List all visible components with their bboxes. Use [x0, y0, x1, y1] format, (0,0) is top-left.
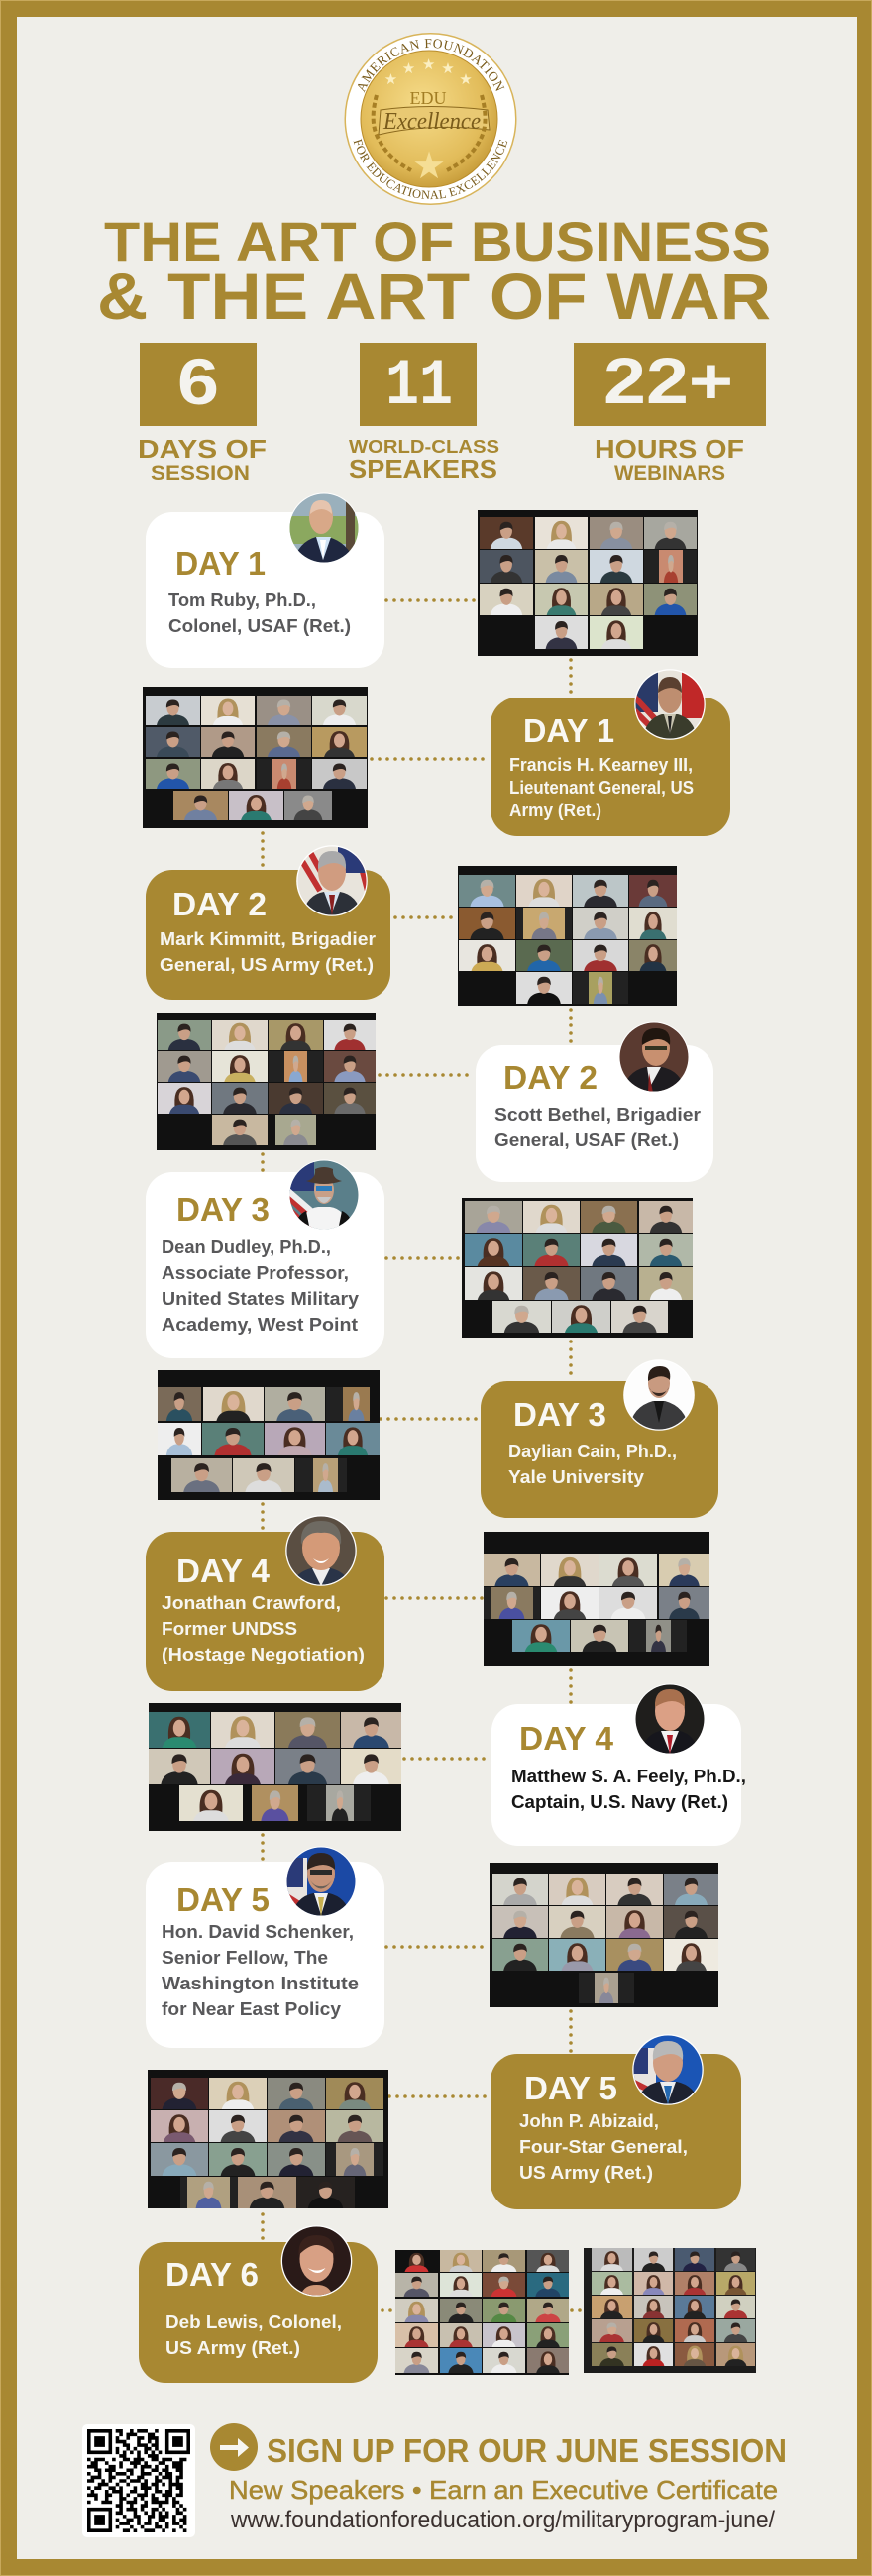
speaker name: Yale University: [508, 1467, 644, 1487]
speaker name: US Army (Ret.): [519, 2163, 653, 2183]
panel: day 2 Mark Kimmitt: [146, 845, 390, 1000]
speaker name: Matthew S. A. Feely, Ph.D.,: [511, 1767, 746, 1786]
avatar: Jonathan Crawford: [285, 1515, 357, 1586]
call to action text: New Speakers • Earn an Executive Certificate: [229, 2475, 778, 2505]
heading: DAY 5: DAY 5: [176, 1881, 270, 1918]
photo: zoom session day 6 first gallery: [395, 2250, 569, 2375]
logo: American Foundation gold seal: [345, 33, 517, 205]
speaker name: Tom Ruby, Ph.D.,: [168, 590, 316, 610]
logo: American Foundation gold seal: AMERICAN FOUNDATION: [358, 39, 505, 93]
stat: 6 days of session: DAYS OF: [138, 434, 267, 464]
speaker name: John P. Abizaid,: [519, 2111, 659, 2131]
avatar: Tom Ruby: [288, 492, 360, 564]
speaker name: [168, 590, 351, 636]
heading: DAY 4: DAY 4: [519, 1720, 614, 1757]
logo: American Foundation gold seal: EDU: [410, 88, 446, 108]
speaker name: Hon. David Schenker,: [162, 1922, 354, 1942]
speaker name: [162, 1922, 359, 2019]
photo: zoom session day 5 Schenker: [490, 1863, 718, 2007]
speaker name: [494, 1105, 701, 1150]
panel: day 5 John Abizaid: [490, 2034, 741, 2209]
avatar: Daylian Cain: [623, 1359, 695, 1431]
speaker name: [508, 1442, 677, 1487]
speaker name: Jonathan Crawford,: [162, 1593, 341, 1613]
stat: 22+ hours of webinars: HOURS OF: [595, 434, 744, 464]
speaker name: [160, 929, 376, 975]
avatar: John P. Abizaid: [632, 2034, 704, 2105]
logo: American Foundation gold seal: Excellence: [382, 109, 481, 135]
call to action text: www.foundationforeducation.org/militaryprogram-june/: [230, 2507, 775, 2533]
speaker name: Lieutenant General, US: [509, 778, 694, 798]
speaker name: Daylian Cain, Ph.D.,: [508, 1442, 677, 1461]
panel: day 1 Francis Kearney: [490, 669, 730, 836]
panel: day 3 Daylian Cain: [481, 1359, 718, 1518]
avatar: Mark Kimmitt: [296, 845, 368, 916]
stat: 11 world-class speakers: [349, 343, 499, 483]
stat: 11 world-class speakers: WORLD-CLASS: [349, 437, 499, 457]
logo: American Foundation gold seal: ★: [412, 144, 446, 187]
logo: American Foundation gold seal: FOR EDUCATIONAL EXCELLENCE: [353, 139, 507, 200]
heading: DAY 1: DAY 1: [523, 712, 614, 749]
heading: DAY 1: DAY 1: [175, 545, 266, 582]
speaker name: Deb Lewis, Colonel,: [165, 2312, 342, 2332]
call to action text: [229, 2432, 787, 2533]
speaker name: for Near East Policy: [162, 1999, 341, 2019]
panel: day 4 Jonathan Crawford: [146, 1515, 384, 1691]
logo: American Foundation gold seal: ★: [402, 59, 415, 77]
photo: zoom session day 1 Kearney: [143, 687, 368, 828]
panel: day 3 Dean Dudley: [146, 1159, 384, 1358]
avatar: Deb Lewis: [281, 2225, 353, 2297]
panel: day 2 Scott Bethel: [476, 1021, 713, 1182]
speaker name: [519, 2111, 688, 2183]
photo: zoom session day 2 Kimmitt: [458, 866, 677, 1006]
heading: DAY 2: DAY 2: [503, 1059, 598, 1096]
avatar: Matthew S. A. Feely: [634, 1683, 706, 1755]
heading: DAY 6: DAY 6: [165, 2256, 259, 2293]
speaker name: Four-Star General,: [519, 2137, 688, 2157]
photo: zoom session day 1 Ruby: [478, 510, 698, 656]
stat: 22+ hours of webinars: 22+: [603, 344, 733, 417]
stat: 6 days of session: [138, 343, 267, 484]
stat: 6 days of session: 6: [177, 345, 219, 418]
speaker name: [162, 1237, 359, 1335]
photo: zoom session day 2 Bethel: [157, 1013, 376, 1150]
logo: American Foundation gold seal: ★: [441, 59, 455, 77]
heading: DAY 4: DAY 4: [176, 1553, 271, 1589]
photo: zoom session day 6 second gallery: [584, 2248, 756, 2373]
speaker name: Colonel, USAF (Ret.): [168, 616, 351, 636]
stat: 11 world-class speakers: 11: [385, 349, 453, 423]
logo: American Foundation gold seal: ★: [459, 70, 473, 88]
stat: 6 days of session: SESSION: [151, 462, 250, 484]
speaker name: General, USAF (Ret.): [494, 1130, 679, 1150]
speaker name: Senior Fellow, The: [162, 1948, 328, 1968]
speaker name: Scott Bethel, Brigadier: [494, 1105, 701, 1125]
speaker name: Captain, U.S. Navy (Ret.): [511, 1792, 728, 1812]
heading: DAY 3: DAY 3: [176, 1191, 270, 1228]
photo: zoom session day 4 Crawford: [484, 1532, 709, 1666]
panel: day 6 Deb Lewis: [139, 2225, 378, 2383]
speaker name: Academy, West Point: [162, 1315, 358, 1335]
title: & THE ART OF WAR: [97, 260, 771, 333]
title: THE ART OF BUSINESS: [104, 210, 771, 272]
speaker name: Mark Kimmitt, Brigadier: [160, 929, 376, 949]
heading: DAY 3: DAY 3: [513, 1396, 606, 1433]
speaker name: Francis H. Kearney III,: [509, 755, 693, 775]
stat: 11 world-class speakers: SPEAKERS: [349, 454, 497, 483]
panel: day 1 Tom Ruby: [146, 492, 384, 668]
stat: 22+ hours of webinars: WEBINARS: [614, 462, 725, 484]
speaker name: [509, 755, 694, 820]
call to action text: SIGN UP FOR OUR JUNE SESSION: [267, 2432, 787, 2469]
speaker name: Army (Ret.): [509, 801, 601, 820]
panel: day 5 David Schenker: [146, 1846, 384, 2048]
avatar: Francis H. Kearney III: [634, 669, 706, 740]
photo: zoom session day 4 Feely: [149, 1703, 401, 1831]
QR code: [82, 2424, 195, 2537]
speaker name: Associate Professor,: [162, 1263, 349, 1283]
heading: DAY 2: DAY 2: [172, 886, 267, 922]
heading: DAY 5: DAY 5: [524, 2070, 617, 2106]
speaker name: General, US Army (Ret.): [160, 955, 374, 975]
speaker name: Washington Institute: [162, 1974, 359, 1993]
speaker name: (Hostage Negotiation): [162, 1645, 365, 1664]
speaker name: [162, 1593, 365, 1664]
speaker name: [511, 1767, 746, 1812]
photo: zoom session day 5 Abizaid: [148, 2070, 388, 2208]
stat: 22+ hours of webinars: [574, 343, 766, 484]
avatar: Scott Bethel: [618, 1021, 690, 1093]
speaker name: United States Military: [162, 1289, 359, 1309]
avatar: Dean Dudley: [289, 1159, 359, 1229]
speaker name: [165, 2312, 342, 2358]
avatar: David Schenker: [285, 1846, 357, 1917]
title: [97, 210, 771, 333]
dotted connectors: [263, 600, 584, 2310]
speaker name: US Army (Ret.): [165, 2338, 300, 2358]
logo: American Foundation gold seal: ★: [384, 70, 397, 88]
panel: day 4 Matthew Feely: [491, 1683, 746, 1846]
icon: arrow circle: [210, 2423, 258, 2471]
speaker name: Dean Dudley, Ph.D.,: [162, 1237, 331, 1257]
logo: American Foundation gold seal: ★: [422, 55, 435, 73]
photo: zoom session day 3 Cain: [158, 1370, 380, 1500]
speaker name: Former UNDSS: [162, 1619, 297, 1639]
photo: zoom session day 3 Dudley: [462, 1198, 693, 1338]
